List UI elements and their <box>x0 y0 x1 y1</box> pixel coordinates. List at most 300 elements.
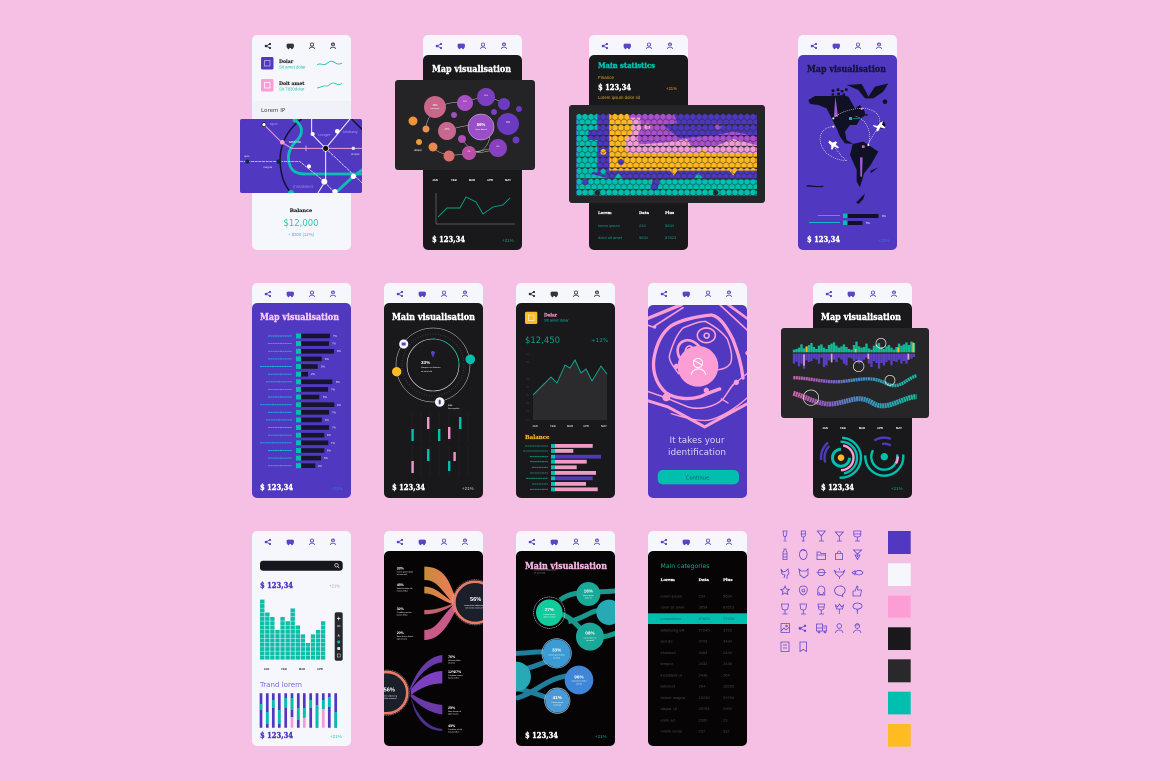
flow bubbles: 96% <box>574 674 584 679</box>
axis labels: APR <box>487 178 493 182</box>
table rows: 2436 <box>698 672 708 677</box>
table title: Main categories <box>660 562 710 570</box>
sankey labels: Curabitur sit elit <box>448 728 462 731</box>
card header: Sit amet dolar <box>544 318 569 322</box>
table rows: 5634 <box>723 594 733 598</box>
flow bubbles: 08% <box>585 631 595 636</box>
table rows: 29754 <box>723 695 735 700</box>
sankey labels: Curabitur mauris <box>397 611 411 614</box>
sankey labels: 76% <box>448 655 456 659</box>
map of the americas <box>807 83 888 204</box>
bubble chart card: lorem ipsum <box>431 108 440 110</box>
sankey labels: Nam dictum lorem <box>397 635 413 638</box>
legend bars: 5% <box>866 221 870 225</box>
table rows: sed do <box>660 638 673 644</box>
search bar <box>260 561 343 571</box>
balance bars <box>523 444 601 491</box>
table rows: 2300 <box>698 717 708 722</box>
horizontal bar chart: 7% <box>332 410 336 414</box>
table rows: 87623 <box>723 605 735 610</box>
footer value <box>821 482 903 492</box>
candlestick chart <box>411 412 468 477</box>
list row: dolar: Sit amet dolar <box>279 64 306 70</box>
table rows: 77245 <box>723 616 735 621</box>
highlighted row <box>648 613 747 624</box>
title: Map visualisation <box>260 313 339 323</box>
balance: $12,000 <box>284 218 318 229</box>
sankey diagrams <box>384 566 483 731</box>
flow bubbles: 16% <box>584 589 594 594</box>
transit map: spot <box>270 121 278 126</box>
headline value: $12,450 <box>525 336 560 346</box>
button: continue <box>658 470 739 484</box>
transit map: magna <box>263 165 273 169</box>
title: Main visualisation <box>525 562 607 572</box>
horizontal bar chart: 9% <box>337 349 341 353</box>
top bar icons <box>384 531 483 571</box>
footer value: $ 123,34 <box>807 234 840 244</box>
header text: $ 123,34 <box>598 82 631 92</box>
balance <box>284 208 318 237</box>
table: Lorem <box>598 210 612 215</box>
area chart: 45 <box>526 377 529 381</box>
message <box>668 436 726 458</box>
table rows: 87623 <box>698 616 710 621</box>
flow bubbles: eiusmod <box>586 640 594 642</box>
phone body <box>423 55 522 250</box>
table header <box>660 577 733 582</box>
table rows: consectetur <box>660 616 682 621</box>
panel: phone 8 identification <box>646 283 750 498</box>
table rows: 3723 <box>698 638 708 644</box>
sankey labels: Vehicula dolor elit <box>397 587 413 590</box>
bubble chart card: 14% <box>484 95 488 97</box>
table rows: 3464 <box>698 650 708 655</box>
radial chart: Sem mapellus <box>448 408 459 410</box>
table rows: 3723 <box>723 627 733 632</box>
horizontal bar chart: 5% <box>321 364 325 368</box>
area chart: 20 <box>526 418 529 422</box>
table: lorem ipsum <box>598 223 620 228</box>
bubble chart card: dolupor <box>414 149 422 152</box>
top bar icons <box>423 35 522 75</box>
balance heading: Balance <box>525 435 550 441</box>
sankey labels: sit amet elit <box>397 573 407 576</box>
transit map: quis <box>244 154 250 158</box>
axis labels: JAN <box>264 667 269 671</box>
top bar icons <box>813 283 912 323</box>
section heading: Lorem IP <box>261 108 286 114</box>
horizontal bar chart: 5% <box>324 456 328 460</box>
table rows: 2433 <box>698 661 708 666</box>
table rows: 237 <box>698 728 706 734</box>
button: continue: Continue <box>686 475 709 481</box>
horizontal bar chart: 6% <box>325 357 329 361</box>
subtitle note <box>534 568 556 574</box>
table rows: 2436 <box>723 661 733 666</box>
horizontal bar chart: 6% <box>327 433 331 437</box>
horizontal bar chart: 7% <box>331 441 335 445</box>
axis labels: JAN <box>432 178 438 182</box>
hexagon heat map card <box>569 105 765 203</box>
sankey labels: mauris tellus <box>448 730 459 734</box>
horizontal bar chart: 7% <box>332 342 336 346</box>
sankey labels: eget mauris <box>448 712 458 716</box>
phone body <box>384 303 483 498</box>
table rows: 29754 <box>698 706 710 711</box>
list row: dolar <box>261 57 342 70</box>
sankey labels: sit amet <box>448 662 455 664</box>
axis labels: MAR <box>469 178 475 182</box>
flow bubbles: 33% <box>552 648 562 653</box>
flow bubbles: sed do <box>576 683 583 685</box>
toolbar <box>335 612 343 661</box>
panel: phone 12 bubbles <box>516 531 615 746</box>
axis labels: FEB <box>281 667 287 671</box>
sankey diagrams: 56% <box>384 688 395 694</box>
table rows: incididunt ut <box>660 672 683 677</box>
table rows: 3434 <box>723 638 733 644</box>
card header <box>525 312 569 324</box>
flow bubbles: Lorem ipsum dolor <box>548 654 565 657</box>
transit map: Longer <box>318 132 331 137</box>
horizontal bar chart: 5% <box>323 395 327 399</box>
title: Map visualisation <box>807 65 886 75</box>
phone body <box>813 303 912 498</box>
sankey diagrams: consectetur adipiscing <box>464 604 484 607</box>
horizontal bar chart: 6% <box>327 448 331 452</box>
footer value <box>260 482 343 492</box>
table rows: 2434 <box>723 650 733 655</box>
footer value: +21% <box>462 486 474 491</box>
phone body <box>252 551 351 746</box>
horizontal bar chart: 8% <box>336 380 340 384</box>
table: 5634 <box>665 223 675 228</box>
phone body <box>798 55 897 250</box>
table rows: lorem ipsum <box>660 594 683 598</box>
footer value: $ 123,34 <box>260 730 293 740</box>
footer value: +21% <box>502 238 514 243</box>
title: Map visualisation <box>821 313 901 323</box>
horizontal bar chart: 7% <box>331 388 335 392</box>
sankey diagrams: elit sed do eiusmod <box>465 606 482 609</box>
transit map: sed do <box>289 139 302 144</box>
sankey labels: 45% <box>397 583 405 587</box>
area chart: MAY <box>601 424 607 428</box>
area chart: FEB <box>550 424 556 428</box>
top bar icons <box>384 283 483 323</box>
sankey labels <box>397 566 463 734</box>
table rows: 234 <box>698 594 706 598</box>
radial chart <box>392 328 475 410</box>
sankey labels: lacinia tellus <box>397 614 408 616</box>
axis labels: APR <box>877 426 883 430</box>
contour map with avatar <box>646 304 750 427</box>
bubble chart card: 27% <box>444 128 450 131</box>
sankey labels: 20% <box>397 631 405 635</box>
headline value: +12% <box>591 338 608 344</box>
subtitle note: consectetur adipiscing <box>534 568 556 572</box>
axis labels: FEB <box>451 178 457 182</box>
horizontal bar chart: 4% <box>318 464 322 468</box>
area chart: 40 <box>526 385 529 389</box>
phone body <box>252 50 351 250</box>
flow bubbles: 41% <box>553 695 563 700</box>
footer value: $ 123,34 <box>260 482 293 492</box>
list row: dolt amet: Dolt amet <box>279 81 305 87</box>
table rows: 337 <box>723 728 730 734</box>
table rows: 16235 <box>698 695 710 700</box>
footer value: $ 123,34 <box>432 234 465 244</box>
radial charts <box>819 431 910 483</box>
axis labels: APR <box>317 667 323 671</box>
list row: dolar: Dolar <box>279 59 294 65</box>
footer value <box>260 730 342 740</box>
panel: phone 4 world map <box>798 35 897 250</box>
subtitle note: sit amet elit <box>534 572 545 574</box>
area chart: JAN <box>532 424 538 428</box>
radial chart: 33% <box>448 405 452 407</box>
value: +21% <box>329 584 340 588</box>
stacked cell bar chart <box>260 599 325 660</box>
line chart <box>436 193 515 224</box>
table rows <box>660 594 735 734</box>
table rows: 264 <box>698 684 706 688</box>
sankey labels: 27% <box>454 670 462 674</box>
footer value <box>525 730 607 740</box>
phone body <box>648 305 747 498</box>
panel: phone 9 waveforms <box>781 283 929 498</box>
sankey diagrams: 56% <box>470 597 481 603</box>
axis labels <box>264 667 323 671</box>
sankey labels: Curabitur mauris <box>448 674 463 677</box>
area chart: 60 <box>526 352 529 356</box>
area chart <box>526 352 607 428</box>
sankey labels: Nam dictum sit <box>448 710 462 713</box>
sankey labels: 25% <box>448 706 456 710</box>
footer value <box>392 482 474 492</box>
header text: Main statistics <box>598 61 655 70</box>
axis labels: JAN <box>822 426 828 430</box>
sankey labels: 32% <box>397 607 405 611</box>
table header: Data <box>698 577 709 582</box>
sankey labels: 33% <box>397 566 405 570</box>
bubble chart card <box>395 80 535 170</box>
header text: +21% <box>666 86 677 91</box>
panel: phone 7 area chart <box>516 283 615 498</box>
table header: Plus <box>723 577 733 582</box>
axis labels: MAY <box>505 178 511 182</box>
axis labels: MAR <box>299 667 305 671</box>
table rows: 77245 <box>698 627 710 632</box>
panel: phone 2 bubble map <box>395 35 535 250</box>
flow bubbles: dolor sit <box>585 596 592 599</box>
sankey labels: Vehicula dolor <box>448 660 461 662</box>
table header: Lorem <box>660 577 676 582</box>
flow bubbles: eiusmod <box>554 705 561 707</box>
footer value: +21% <box>331 486 343 491</box>
sankey labels: 45% <box>448 724 456 728</box>
table: dolor sit amet <box>598 235 623 240</box>
sankey labels: 12% <box>448 670 456 674</box>
axis labels: MAR <box>859 426 865 430</box>
footer value: +21% <box>878 238 890 243</box>
top bar icons <box>516 283 615 323</box>
value: $ 123,34 <box>260 580 293 590</box>
footer value: +21% <box>595 734 607 739</box>
radial chart: 33% <box>421 360 430 365</box>
horizontal bar chart: 9% <box>337 403 341 407</box>
area chart: MAR <box>567 424 573 428</box>
area chart: 55 <box>526 360 529 364</box>
table rows: laboreet <box>660 684 676 688</box>
table rows: tempor <box>660 661 674 666</box>
headline value <box>525 336 608 346</box>
bubble chart card: 8% <box>496 146 500 148</box>
footer value: $ 123,34 <box>392 482 425 492</box>
top bar icons <box>252 35 351 75</box>
table: Data <box>639 210 650 215</box>
table rows: dolor sit amet <box>660 605 685 610</box>
balance: + $300 (12%) <box>288 232 315 237</box>
transit map <box>240 118 363 196</box>
table rows: eiusmod <box>660 650 676 655</box>
table: 87623 <box>665 235 677 240</box>
sankey labels: mauris tellus <box>397 590 408 592</box>
top bar icons <box>516 531 615 571</box>
panel: phone 11 sankey <box>384 531 483 746</box>
balance: Balance <box>290 208 312 214</box>
footer value: $ 123,34 <box>821 482 854 492</box>
area chart: APR <box>583 424 589 428</box>
sankey diagrams: consectetur adipiscing <box>377 695 397 698</box>
bubble chart card: 56% <box>477 122 485 127</box>
horizontal bar chart <box>260 334 341 468</box>
top bar icons <box>798 35 897 75</box>
top bar icons <box>252 283 351 323</box>
horizontal bar chart: 7% <box>332 426 336 430</box>
area chart: 25 <box>526 409 529 413</box>
horizontal bar chart: 7% <box>333 334 337 338</box>
table: 234 <box>639 223 646 228</box>
footer value <box>432 234 514 244</box>
waveform card <box>781 328 929 418</box>
flow bubbles: Lorem ipsum <box>544 613 555 616</box>
flow bubbles: dolor sit amet <box>543 616 556 619</box>
panel: phone 1 transit map <box>240 35 363 250</box>
flow bubbles: consectetur dolor <box>571 680 587 683</box>
colour swatches <box>888 531 911 747</box>
transit map: InstaMeet <box>293 184 314 189</box>
top bar icons <box>589 35 688 75</box>
bubble chart card: 21% <box>463 101 467 103</box>
header text: Lorem ipsum dolor sit <box>598 95 641 100</box>
heading: Trand lorem <box>259 681 302 689</box>
area chart: 30 <box>526 401 529 405</box>
transit map: kristiany <box>343 129 358 134</box>
radial chart: Sempre vis dolorem <box>421 366 441 369</box>
list row: dolt amet: Sit 7830dolar <box>279 86 305 92</box>
phone body <box>252 303 351 498</box>
sankey labels: lacinia tellus <box>448 676 459 680</box>
phone body <box>516 551 615 746</box>
panel: phone 6 radial <box>384 283 483 498</box>
horizontal bar chart: 2% <box>311 372 315 376</box>
top bar icons <box>252 531 351 571</box>
flow bubbles: 27% <box>545 607 555 612</box>
table: 5634 <box>639 235 649 240</box>
legend bars: 9% <box>882 214 886 218</box>
table <box>598 210 677 240</box>
panel: phone 10 bars <box>252 531 351 746</box>
flow bubbles: lorem ipsum <box>583 594 594 597</box>
footer value <box>807 234 890 244</box>
sankey diagrams: elit sed do eiusmod <box>379 697 396 700</box>
section heading <box>252 101 351 131</box>
table rows: enim ad <box>660 717 675 722</box>
axis labels <box>822 426 902 430</box>
sankey labels: eget mauris <box>397 638 407 640</box>
stacked vertical bars <box>261 693 336 728</box>
header text <box>598 61 677 100</box>
table rows: minim venia <box>660 728 683 734</box>
title: Map visualisation <box>432 65 511 75</box>
flow bubbles: consectetur sit <box>584 636 597 639</box>
phone body <box>384 551 483 746</box>
axis labels <box>432 178 511 182</box>
flow bubbles: sit amet <box>553 656 561 659</box>
table rows: 23 <box>723 717 728 722</box>
message: It takes your <box>670 436 725 446</box>
transit map: simple <box>351 152 360 156</box>
list row: dolt amet <box>261 79 342 92</box>
header text: Finance <box>598 75 615 80</box>
axis labels: FEB <box>840 426 846 430</box>
footer value: +21% <box>891 486 903 491</box>
phone body <box>589 55 688 250</box>
panel: phone 3 statistics <box>569 35 765 250</box>
table rows: 2900 <box>723 706 733 711</box>
value <box>260 580 340 590</box>
flow bubbles: Lorem ipsum <box>552 701 563 704</box>
axis labels: MAY <box>896 426 902 430</box>
footer value: $ 123,34 <box>525 730 558 740</box>
table: Plus <box>665 210 674 215</box>
bubble chart card: 33% <box>432 104 438 107</box>
top bar icons <box>648 531 747 571</box>
bubble chart card: Lorem dolor sit <box>475 128 487 131</box>
flow bubbles <box>516 582 615 714</box>
table rows: adipiscing elit <box>660 627 685 632</box>
area chart: 35 <box>526 393 529 397</box>
icon set <box>781 531 863 652</box>
title: Main visualisation <box>392 313 475 323</box>
bubble chart card: 9% <box>506 121 511 124</box>
radial chart: sit amet elit <box>421 370 432 373</box>
footer value: +21% <box>330 734 342 739</box>
phone body <box>516 303 615 498</box>
message: identification <box>668 448 726 458</box>
sankey labels: Lorem ipsum dolor <box>397 572 414 574</box>
panel: phone 5 bar list <box>252 283 351 498</box>
legend bars <box>809 214 886 225</box>
top bar icons <box>648 283 747 323</box>
bubble chart card: 6% <box>468 151 471 153</box>
table rows: 264 <box>723 672 730 677</box>
table rows: aliqua. Ut <box>660 706 678 711</box>
card header: Dolar <box>544 312 558 318</box>
table rows: 18235 <box>723 684 735 688</box>
